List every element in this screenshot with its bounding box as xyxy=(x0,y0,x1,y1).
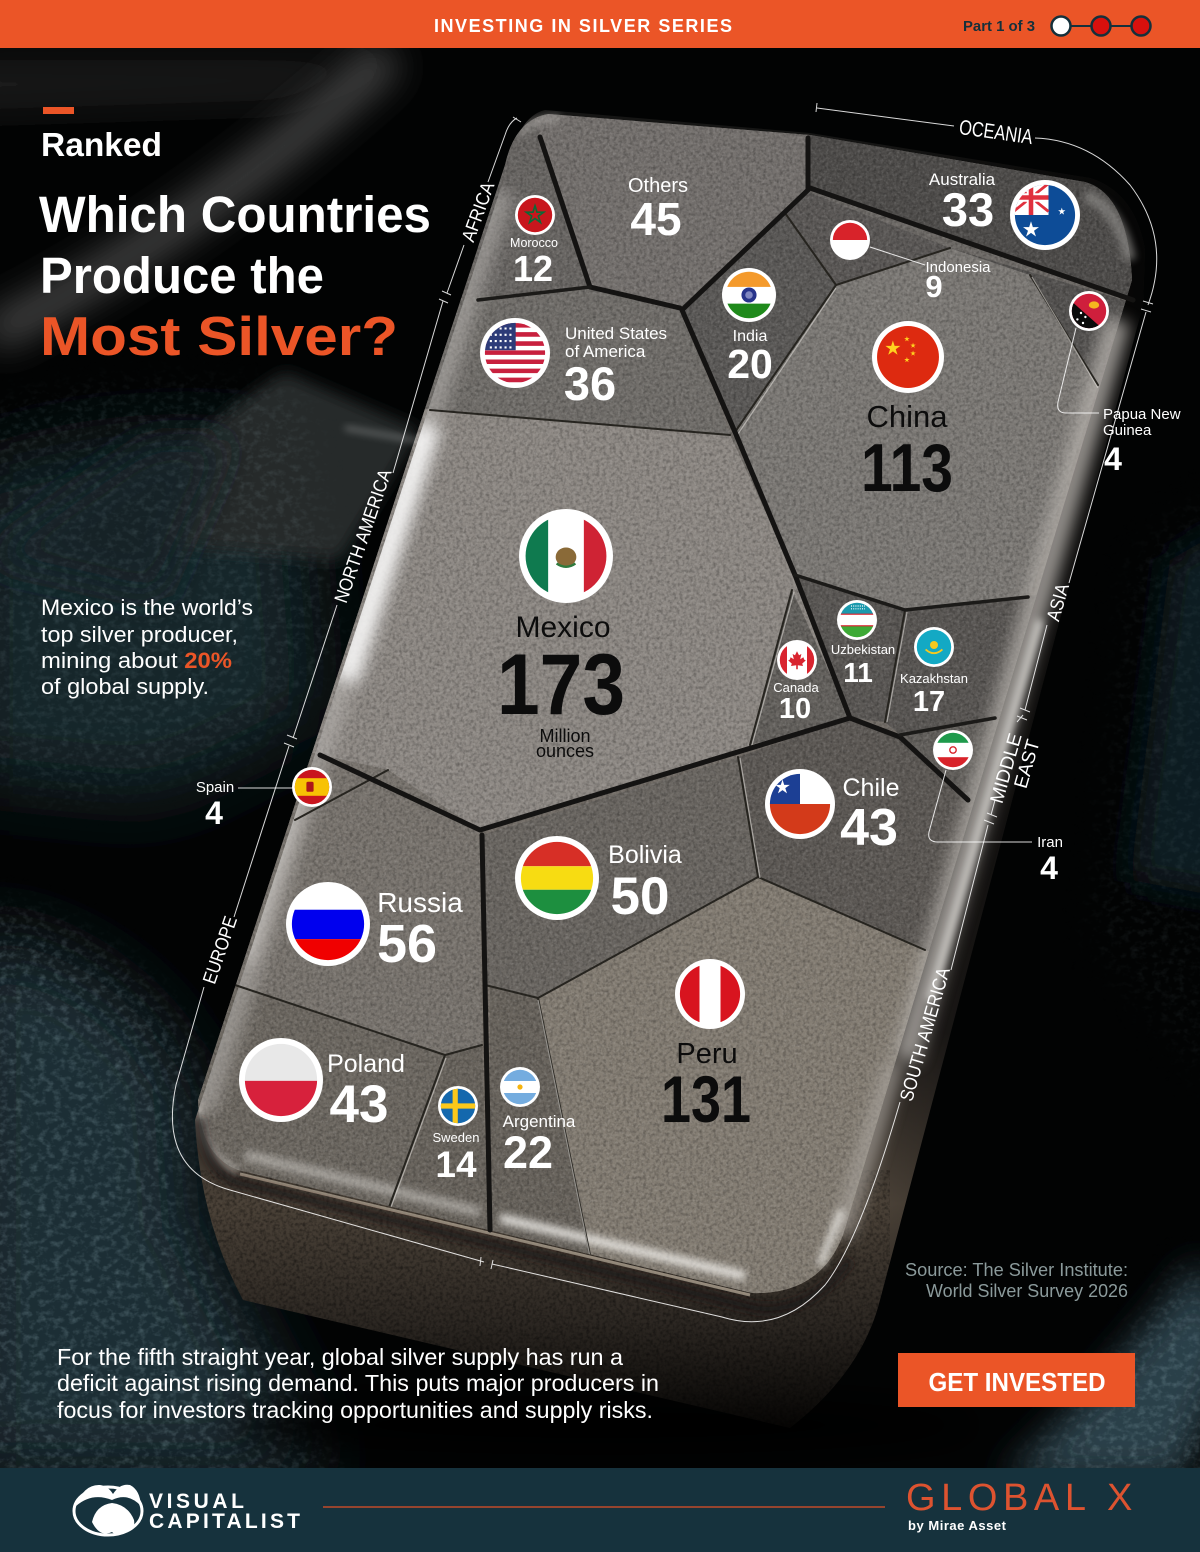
label: Papua New Guinea 4: Guinea xyxy=(1103,422,1152,439)
flag: Bolivia xyxy=(515,836,599,920)
label: Russia 56: 56 xyxy=(377,914,437,974)
cell: Peru xyxy=(539,878,929,1294)
label: China 113: China xyxy=(866,399,948,434)
cell: Indonesia xyxy=(785,192,950,284)
flag: Iran xyxy=(933,730,973,770)
logo: Global X by Mirae Asset: GLOBAL xyxy=(906,1477,1086,1519)
label: Spain 4 xyxy=(196,779,234,831)
label: Kazakhstan 17: 17 xyxy=(913,686,945,718)
label: United States 36: United States xyxy=(565,324,667,343)
flag: India xyxy=(722,268,776,323)
flag: Morocco xyxy=(515,195,555,235)
label: Canada 10 xyxy=(773,680,820,725)
flag: Sweden xyxy=(438,1086,478,1126)
label: Sweden 14 xyxy=(433,1130,479,1185)
label: Peru 131 xyxy=(661,1038,751,1136)
intro text: For the fifth straight year, global silver supply has run a xyxy=(57,1344,623,1370)
callout text xyxy=(41,595,253,699)
flag: Mexico xyxy=(519,509,613,603)
label: Peru 131: 131 xyxy=(661,1062,751,1136)
label: Indonesia 9: Indonesia xyxy=(925,259,991,276)
label: Russia 56: Russia xyxy=(377,887,463,918)
cell: Sweden xyxy=(400,1046,488,1230)
label: United States 36: of America xyxy=(565,342,646,361)
flag: Russia xyxy=(286,882,370,969)
cell: Spain xyxy=(288,753,383,825)
region label: Asia: ASIA xyxy=(1043,581,1074,624)
cell: Others xyxy=(535,114,810,204)
flag: Canada xyxy=(777,640,817,680)
label: Peru 131: Peru xyxy=(676,1038,738,1070)
label: Spain 4: 4 xyxy=(205,795,223,831)
label: Argentina 22: 22 xyxy=(503,1127,553,1178)
flag: Kazakhstan xyxy=(914,627,954,667)
label: Others 45: 45 xyxy=(630,193,682,245)
header bar xyxy=(0,0,1200,48)
label: Papua New Guinea 4: Papua New xyxy=(1103,406,1181,423)
leader lines xyxy=(238,247,1099,842)
bar side grain xyxy=(200,1170,890,1388)
label: Uzbekistan 11 xyxy=(831,642,895,688)
source xyxy=(905,1260,1128,1301)
label: Iran 4: 4 xyxy=(1040,850,1058,886)
label: Russia 56 xyxy=(377,887,463,974)
region label: South America: SOUTH AMERICA xyxy=(897,965,955,1104)
region label: Middle East: MIDDLE xyxy=(987,731,1027,806)
flag: United States xyxy=(480,318,550,388)
cell: Kazakhstan xyxy=(886,596,1032,734)
light flare at left edge xyxy=(345,428,425,442)
accent dash xyxy=(43,107,74,114)
label: Indonesia 9: 9 xyxy=(925,269,943,304)
label: Papua New Guinea 4 xyxy=(1103,406,1181,477)
region label: Middle East: EAST xyxy=(1011,737,1045,791)
cell: Poland xyxy=(198,986,444,1209)
intro text xyxy=(57,1344,659,1423)
label: India 20: India xyxy=(733,328,767,345)
callout text: Mexico is the world’s xyxy=(41,595,253,620)
label: Morocco 12: 12 xyxy=(513,248,553,289)
title: Ranked xyxy=(41,126,162,163)
label: Canada 10: 10 xyxy=(779,693,811,725)
label: Bolivia 50: Bolivia xyxy=(608,841,682,869)
cell: Russia xyxy=(236,753,464,985)
label: Morocco 12: Morocco xyxy=(510,236,558,250)
label: Sweden 14: Sweden xyxy=(433,1130,479,1145)
cell: India xyxy=(682,215,836,432)
title: Produce the xyxy=(40,247,324,304)
title: Which Countries xyxy=(39,186,431,243)
label: Iran 4: Iran xyxy=(1037,834,1063,851)
cell: Morocco xyxy=(478,119,534,248)
title: Most Silver? xyxy=(40,305,398,367)
cell: China xyxy=(735,248,1098,610)
label: Uzbekistan 11: 11 xyxy=(843,657,873,688)
region brackets xyxy=(172,103,1157,1322)
source: Source: The Silver Institute: xyxy=(905,1260,1128,1280)
flag: Poland xyxy=(239,1038,323,1123)
flag: Papua New Guinea xyxy=(1069,291,1109,331)
footer xyxy=(0,1468,1200,1552)
flag: Australia xyxy=(1010,180,1080,250)
button: get invested xyxy=(898,1353,1135,1407)
label: China 113: 113 xyxy=(861,430,953,506)
cell: Australia xyxy=(808,135,1132,296)
header bar: Part 1 of 3 xyxy=(963,18,1035,35)
label: Others 45: Others xyxy=(628,175,688,197)
cell: Bolivia xyxy=(482,757,758,998)
source: World Silver Survey 2026 xyxy=(926,1281,1128,1301)
logo: Global X by Mirae Asset xyxy=(906,1477,1132,1533)
label: Australia 33: Australia xyxy=(929,170,996,189)
callout text: of global supply. xyxy=(41,674,209,699)
region label: North America: NORTH AMERICA xyxy=(331,466,397,606)
label: Poland 43 xyxy=(327,1050,405,1134)
callout text: mining about 20% xyxy=(41,648,232,673)
cell: Uzbekistan xyxy=(797,575,905,722)
label: Mexico 173: Million xyxy=(539,726,591,746)
label: Mexico 173: ounces xyxy=(536,741,594,761)
groove highlights xyxy=(390,277,1098,1257)
intro text: focus for investors tracking opportunities and supply risks. xyxy=(57,1397,653,1423)
deep groove lines xyxy=(320,137,1133,1230)
flag: China xyxy=(872,321,944,393)
flag: Chile xyxy=(765,769,835,839)
bar rim highlights xyxy=(198,118,1130,1309)
logo: Visual Capitalist xyxy=(74,1485,300,1535)
label: United States 36: 36 xyxy=(564,357,616,410)
label: Bolivia 50 xyxy=(608,841,682,926)
label: Argentina 22 xyxy=(503,1112,576,1178)
label: Mexico 173: Mexico xyxy=(515,611,611,644)
flag: Argentina xyxy=(500,1067,540,1107)
cell: Argentina xyxy=(490,988,588,1254)
cell: Canada xyxy=(750,590,850,745)
metal grain texture xyxy=(180,100,1160,1330)
cell: Iran xyxy=(904,722,990,797)
label: Chile 43 xyxy=(840,774,899,857)
thin groove lines xyxy=(235,213,1098,1255)
label: Iran 4 xyxy=(1037,834,1063,886)
logo: Global X by Mirae Asset: X xyxy=(1107,1477,1132,1519)
cell: Chile xyxy=(739,720,971,950)
label: Others 45 xyxy=(628,175,688,245)
button: get invested: GET INVESTED xyxy=(928,1367,1106,1397)
cell: United States xyxy=(425,298,462,408)
label: United States 36 xyxy=(564,324,667,410)
flag: Indonesia xyxy=(830,220,870,260)
label: Chile 43: Chile xyxy=(843,774,899,802)
silver bar xyxy=(195,110,1145,1455)
label: Australia 33 xyxy=(929,170,996,236)
label: Argentina 22: Argentina xyxy=(503,1112,576,1131)
label: Uzbekistan 11: Uzbekistan xyxy=(831,642,895,657)
cell: Papua New Guinea xyxy=(954,249,1126,379)
label: Kazakhstan 17 xyxy=(900,671,968,718)
logo: Global X by Mirae Asset: by Mirae Asset xyxy=(908,1518,1007,1533)
cell: Mexico xyxy=(300,408,850,830)
label: Chile 43: 43 xyxy=(840,799,898,857)
callout text: top silver producer, xyxy=(41,622,238,647)
flag: Peru xyxy=(675,959,745,1029)
label: Poland 43: 43 xyxy=(330,1075,388,1134)
logo: Visual Capitalist: VISUAL xyxy=(149,1490,244,1513)
label: India 20: 20 xyxy=(727,341,773,387)
label: Sweden 14: 14 xyxy=(435,1144,477,1185)
label: Mexico 173 xyxy=(497,611,625,761)
label: Bolivia 50: 50 xyxy=(611,867,669,926)
title xyxy=(39,126,431,367)
label: China 113 xyxy=(861,399,953,506)
label: Kazakhstan 17: Kazakhstan xyxy=(900,671,968,686)
label: Australia 33: 33 xyxy=(942,183,994,236)
medium groove lines xyxy=(478,287,1028,735)
intro text: deficit against rising demand. This puts major producers in xyxy=(57,1370,659,1396)
header bar: INVESTING IN SILVER SERIES xyxy=(434,16,732,36)
flag: Spain xyxy=(292,767,332,807)
logo: Visual Capitalist: CAPITALIST xyxy=(149,1510,300,1533)
label: Papua New Guinea 4: 4 xyxy=(1104,441,1122,477)
label: Morocco 12 xyxy=(510,236,558,289)
label: Spain 4: Spain xyxy=(196,779,234,796)
map cells on the bar xyxy=(180,105,1150,1320)
region label: Oceania: OCEANIA xyxy=(958,116,1034,149)
region label: Europe: EUROPE xyxy=(199,914,242,987)
label: Indonesia 9 xyxy=(925,259,991,304)
label: Canada 10: Canada xyxy=(773,680,820,695)
region label: Africa: AFRICA xyxy=(458,179,499,245)
label: Poland 43: Poland xyxy=(327,1050,405,1078)
flag: Uzbekistan xyxy=(837,600,877,640)
label: Mexico 173: 173 xyxy=(497,637,625,733)
